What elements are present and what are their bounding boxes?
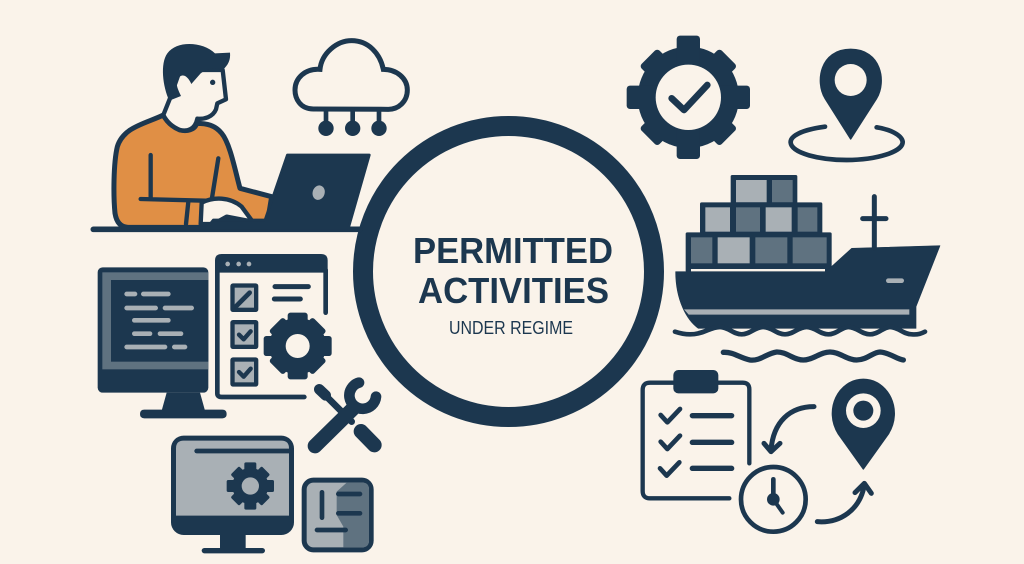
window dots <box>225 262 251 266</box>
icon: container ship <box>675 175 940 360</box>
heading line 2: ACTIVITIES <box>418 270 609 311</box>
mast <box>863 197 886 248</box>
bottom container row <box>686 232 832 272</box>
screen bar <box>197 444 289 458</box>
pin hole <box>835 64 867 96</box>
arrow: clock to pin <box>817 483 871 522</box>
laptop <box>207 155 369 228</box>
tile frame <box>302 478 374 552</box>
icon: wrench and screwdriver <box>315 383 376 446</box>
icon: gear with check mark <box>627 36 750 159</box>
arm creases <box>141 155 218 224</box>
hair <box>163 44 230 101</box>
screwdriver shaft <box>320 390 352 422</box>
wrench handle <box>315 408 353 446</box>
checkbox 2 <box>230 320 258 349</box>
checkbox 3 <box>230 357 258 387</box>
eye <box>210 80 215 85</box>
icon: small layout tile <box>302 478 374 552</box>
top container row <box>731 175 797 205</box>
check mark <box>672 85 707 110</box>
check marks <box>660 409 680 476</box>
minute hand <box>773 499 783 513</box>
screwdriver tip <box>319 389 326 395</box>
monitor screen <box>111 280 208 362</box>
pin center <box>853 401 873 421</box>
window frame <box>217 270 326 397</box>
arrow: pin to clock <box>764 407 814 452</box>
connectors <box>326 109 379 128</box>
hull stripe <box>684 309 909 315</box>
list lines <box>692 416 732 468</box>
gear <box>227 462 274 510</box>
pin ring <box>846 393 881 428</box>
code lines <box>127 294 192 347</box>
tile lines <box>317 492 360 530</box>
monitor stand <box>220 535 246 548</box>
gear body <box>638 47 739 148</box>
checkbox 1 <box>230 283 258 312</box>
waterline wave <box>675 327 925 334</box>
icon: checklist window with gear <box>215 254 332 397</box>
face and neck <box>163 70 226 131</box>
clock hands <box>766 479 780 499</box>
icon: destination pin <box>832 379 894 469</box>
hull <box>676 246 940 328</box>
icon: code monitor <box>98 267 227 418</box>
lower wave <box>723 352 903 360</box>
icon: clipboard checklist <box>643 370 749 498</box>
icon: settings monitor <box>171 436 294 551</box>
monitor base <box>204 543 262 559</box>
monitor screen <box>176 441 289 516</box>
subtitle: UNDER REGIME <box>449 318 573 338</box>
cloud outline <box>295 41 407 109</box>
nodes <box>318 121 387 136</box>
pin <box>820 49 881 139</box>
clipboard clip <box>673 370 718 393</box>
tile face <box>307 483 369 547</box>
laptop logo <box>311 184 327 201</box>
icon: person working at laptop <box>93 44 369 229</box>
monitor stand <box>140 393 227 418</box>
clock hub <box>767 493 780 506</box>
gear teeth <box>627 36 750 159</box>
window header <box>215 254 328 273</box>
title: permitted activities <box>413 230 613 338</box>
wrench head <box>349 383 376 409</box>
icon: cloud network <box>295 41 407 136</box>
desk line <box>93 221 360 238</box>
ring <box>791 127 903 160</box>
text lines <box>274 287 308 299</box>
icon: clock <box>741 467 806 532</box>
screwdriver handle <box>361 431 374 445</box>
middle container row <box>700 202 822 234</box>
icon: location pin with ring <box>791 49 903 160</box>
tile shaded area <box>337 483 369 547</box>
monitor body <box>98 267 208 393</box>
deck stripe <box>691 269 825 272</box>
gear hole <box>656 65 721 130</box>
torso <box>114 115 272 227</box>
gear <box>264 313 332 379</box>
hand <box>201 199 253 224</box>
clipboard outline <box>643 383 749 498</box>
central circle <box>363 126 654 417</box>
porthole <box>888 274 902 288</box>
pin <box>832 379 894 469</box>
monitor body <box>171 436 294 535</box>
clock face <box>741 467 806 532</box>
heading line 1: PERMITTED <box>413 230 613 271</box>
monitor bezel <box>102 272 208 369</box>
